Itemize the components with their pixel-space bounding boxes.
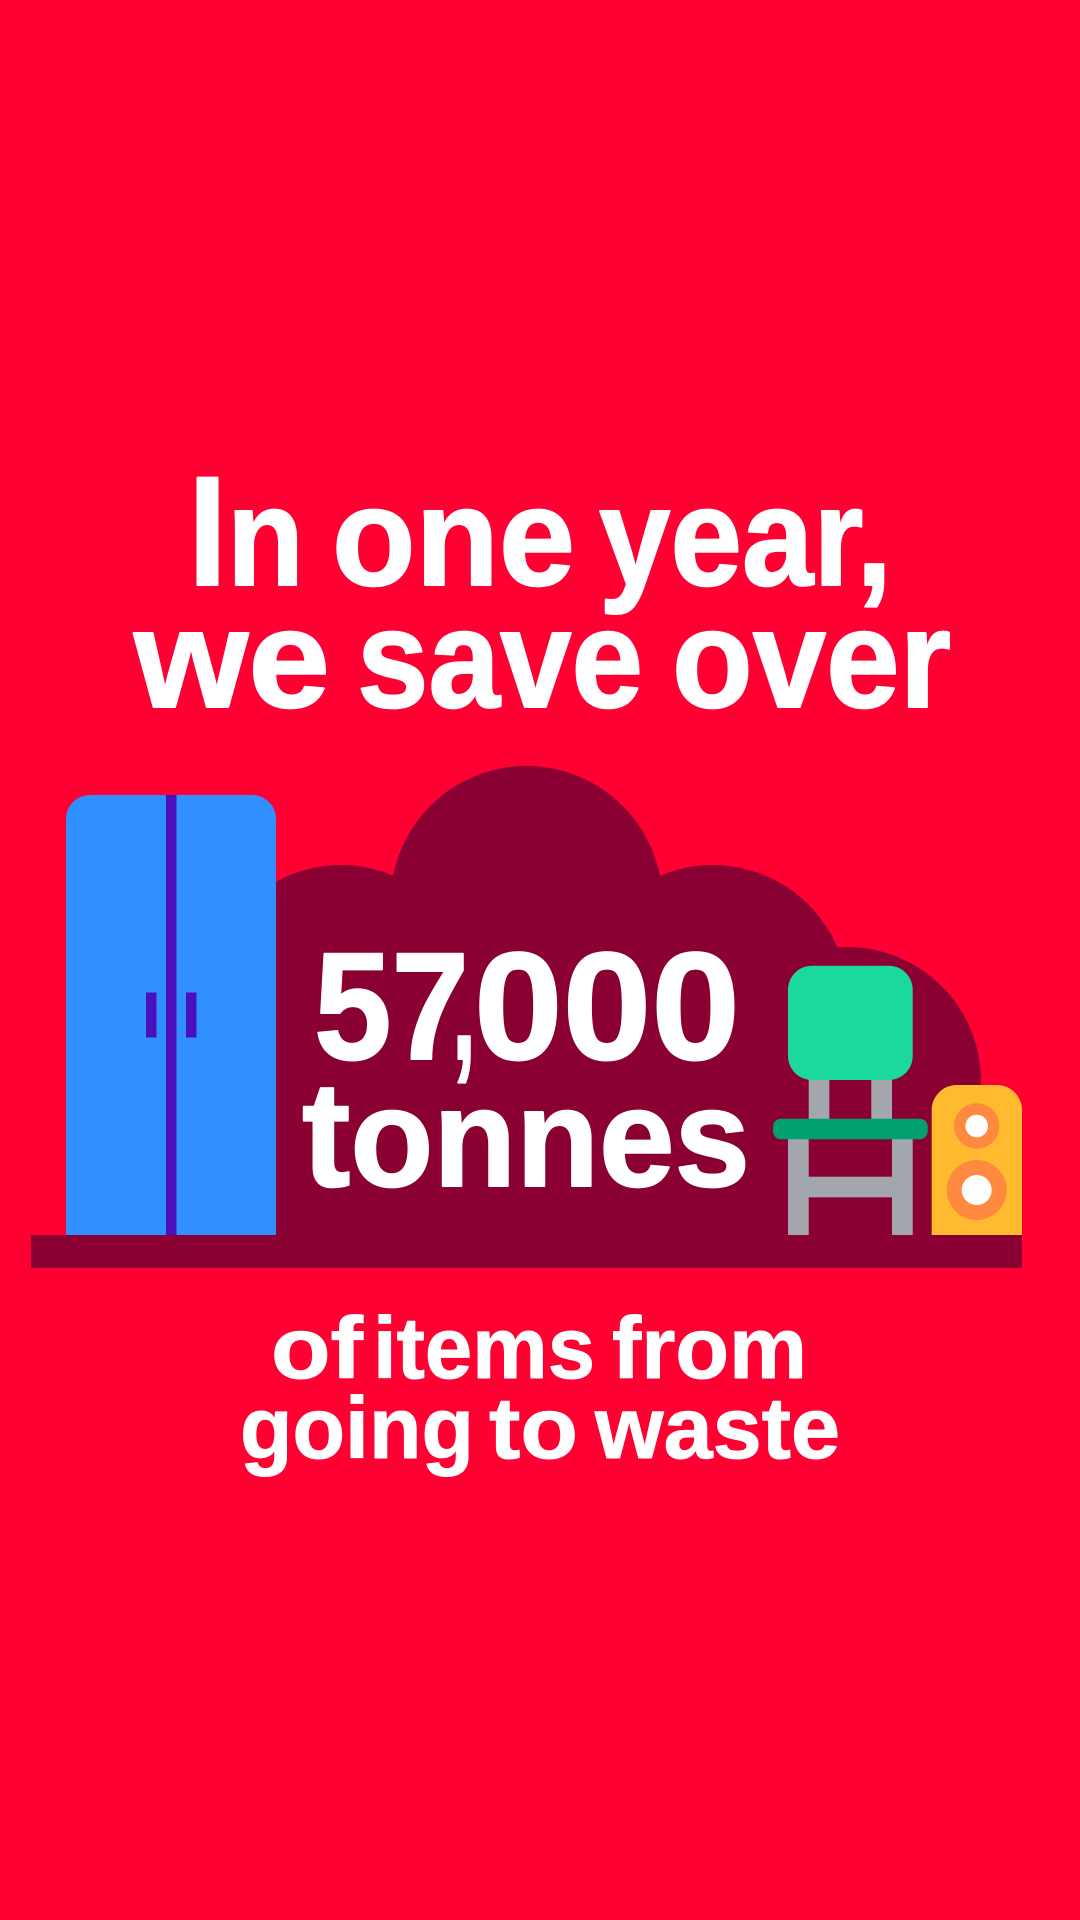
pile silhouette — [206, 766, 981, 1240]
big number: 57,000: 000 — [474, 921, 740, 1092]
icon: blue wardrobe — [66, 795, 276, 1235]
caption: of items from going to waste: from — [612, 1300, 807, 1397]
big label: tonnes: tonnes — [302, 1050, 750, 1218]
big number: 57,000: , — [452, 921, 476, 1092]
caption: of items from going to waste: of — [271, 1300, 364, 1397]
heading: In one year, we save over: year, — [599, 458, 892, 615]
caption: of items from going to waste: to — [489, 1380, 578, 1477]
caption: of items from going to waste: going — [240, 1380, 474, 1477]
icon: speaker — [932, 1085, 1022, 1235]
caption: of items from going to waste: waste — [594, 1380, 840, 1477]
heading: In one year, we save over: one — [332, 458, 575, 615]
heading: In one year, we save over — [133, 445, 951, 737]
icon: chair — [773, 966, 928, 1235]
heading: In one year, we save over: In — [188, 445, 304, 619]
heading: In one year, we save over: over — [672, 580, 951, 737]
heading: In one year, we save over: save — [357, 580, 643, 737]
caption: of items from going to waste — [240, 1300, 840, 1477]
big number: 57,000: 57 — [314, 921, 469, 1092]
ground shelf — [31, 1235, 1022, 1268]
illustration: pile of items — [31, 766, 1022, 1268]
caption: of items from going to waste: items — [373, 1300, 595, 1397]
heading: In one year, we save over: we — [133, 580, 330, 737]
